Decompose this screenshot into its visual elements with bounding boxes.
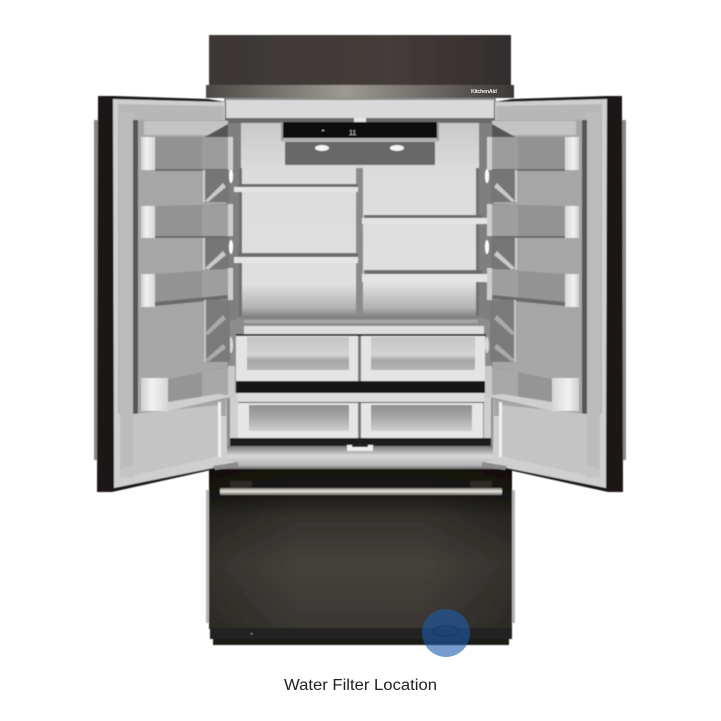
right door bracket 2	[491, 238, 517, 271]
control panel	[281, 118, 439, 165]
door bracket 2	[203, 238, 229, 271]
right door hinge	[482, 462, 507, 470]
brand trim strip	[206, 85, 514, 98]
door bin 1	[141, 121, 233, 171]
header band	[226, 100, 494, 118]
water filter location marker	[422, 609, 470, 657]
left column shelves	[234, 184, 358, 263]
refrigerator illustration	[94, 35, 626, 645]
shelf lights	[229, 169, 489, 353]
door bracket 3	[204, 300, 230, 362]
right door bracket 1	[491, 170, 517, 202]
lower drawers	[230, 381, 491, 447]
caption: Water Filter Location	[284, 677, 437, 694]
upper crisper drawers	[236, 318, 486, 381]
drawer handle	[220, 488, 502, 495]
right column shelves	[362, 215, 487, 282]
door bin 2	[141, 204, 233, 238]
right door bin 3	[487, 268, 579, 307]
door hinge	[213, 462, 238, 470]
freezer drawer	[206, 469, 515, 629]
right door bin 2	[487, 204, 579, 238]
top cabinet panel	[209, 35, 511, 86]
shelf rails	[239, 168, 479, 316]
brand logo: KitchenAid	[471, 89, 497, 95]
door bin 4	[141, 366, 235, 411]
lower interior band	[226, 444, 495, 470]
door bin 3	[141, 268, 233, 307]
right door bracket 3	[490, 300, 516, 362]
back wall	[241, 123, 479, 320]
fridge interior	[224, 98, 496, 470]
right door bin 4	[485, 366, 579, 411]
left door	[94, 96, 238, 492]
right door	[482, 96, 626, 492]
toe kick	[210, 626, 512, 645]
right door bin 1	[487, 121, 579, 171]
control panel: 11	[349, 130, 356, 137]
door bracket 1	[203, 170, 229, 202]
